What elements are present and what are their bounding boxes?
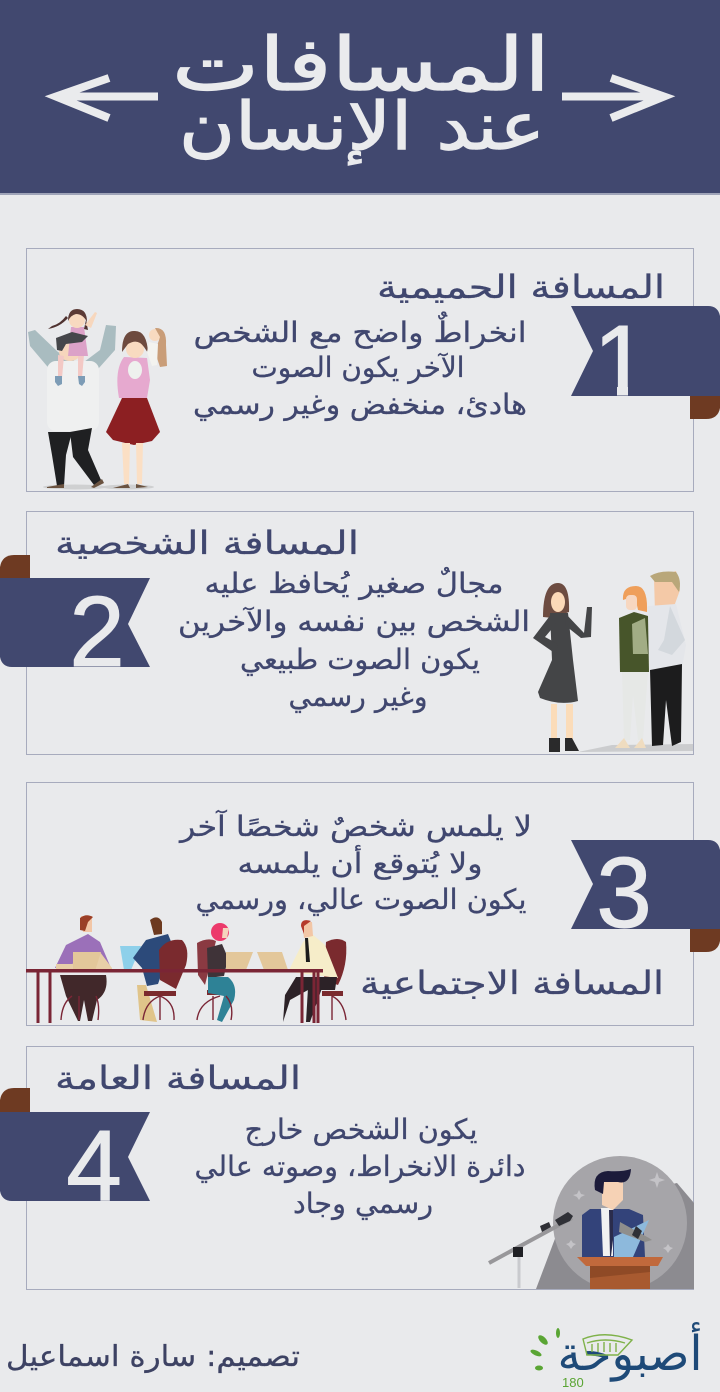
body text 2 [178, 567, 530, 713]
body text 4: رسمي وجاد [293, 1187, 433, 1220]
body text 1: هادئ، منخفض وغير رسمي [193, 388, 527, 421]
body text 2: يكون الصوت طبيعي [240, 643, 480, 676]
arrow: left [56, 78, 158, 118]
title: المسافات [172, 22, 550, 108]
panel 4: public distance [0, 1046, 694, 1290]
panel 3: social distance [26, 782, 720, 1026]
illustration: family [28, 309, 167, 490]
heading 2: المسافة الشخصية [55, 524, 359, 562]
body text 3 [178, 810, 532, 916]
body text 1 [193, 311, 527, 421]
title: عند الإنسان [179, 88, 545, 165]
ribbon 3 [571, 837, 720, 952]
panel 2: personal distance [0, 512, 694, 754]
body text 4 [194, 1113, 526, 1220]
logo number 180: 180 [562, 1375, 584, 1390]
illustration: three standing people [533, 571, 693, 752]
illustration: meeting table [26, 915, 346, 1023]
logo [530, 1322, 702, 1390]
ribbon 2 [0, 555, 150, 688]
body text 3: لا يلمس شخصٌ شخصًا آخر [178, 810, 532, 843]
ribbon 1: 1 [593, 305, 649, 417]
ribbon 4: 4 [66, 1110, 122, 1222]
logo wordmark: أصبوحة [558, 1322, 702, 1382]
ribbon 3: 3 [596, 837, 652, 949]
body text 2: وغير رسمي [288, 680, 428, 713]
logo leaves [530, 1328, 560, 1370]
body text 4: يكون الشخص خارج [244, 1113, 478, 1147]
arrow: right [562, 78, 664, 118]
body text 3: ولا يُتوقع أن يلمسه [238, 844, 482, 880]
ribbon 1 [571, 305, 720, 419]
panel 1: intimate distance [26, 248, 720, 492]
header banner [0, 0, 720, 195]
body text 4: دائرة الانخراط، وصوته عالي [194, 1150, 526, 1183]
heading 4: المسافة العامة [55, 1059, 301, 1097]
designer credit: تصميم: سارة اسماعيل [6, 1339, 300, 1374]
illustration: speaker at podium [489, 1156, 694, 1290]
body text 1: انخراطٌ واضح مع الشخص [194, 311, 526, 349]
title [172, 22, 550, 165]
heading 1: المسافة الحميمية [377, 268, 665, 306]
body text 1: الآخر يكون الصوت [252, 351, 464, 384]
heading 3: المسافة الاجتماعية [360, 964, 664, 1002]
body text 3: يكون الصوت عالي، ورسمي [196, 883, 526, 916]
ribbon 4 [0, 1088, 150, 1222]
ribbon 2: 2 [69, 576, 125, 688]
body text 2: الشخص بين نفسه والآخرين [178, 605, 530, 638]
logo building [583, 1335, 632, 1355]
body text 2: مجالٌ صغير يُحافظ عليه [204, 567, 504, 600]
